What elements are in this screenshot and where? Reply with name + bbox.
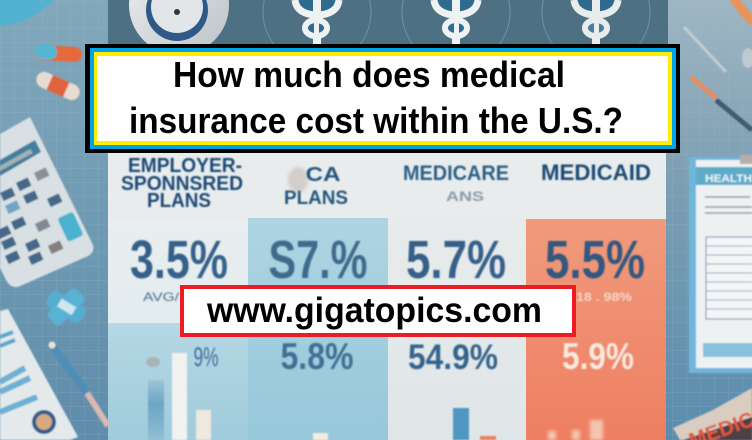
column 3 medicare (388, 218, 526, 440)
table header band (108, 150, 666, 220)
panel: health form document (689, 155, 752, 373)
bar charts (146, 353, 603, 440)
heading: ACA plans: PLANS (284, 188, 348, 209)
icon: stethoscope head (129, 0, 229, 55)
stat: 5.8%: 5.8% (280, 336, 354, 377)
stat: 5.9%: 5.9% (562, 336, 634, 377)
icon: caduceus 1 (263, 0, 371, 66)
heading: ACA plans (284, 164, 348, 209)
icon: capsule pills (34, 44, 82, 103)
stat: 54.9%: 54.9% (408, 338, 498, 377)
percentage figures (130, 230, 645, 377)
column 4 medicaid (526, 219, 666, 440)
icon: caduceus 2 (402, 0, 510, 66)
icon: report sheet with charts (0, 309, 78, 440)
bars: ACA column (313, 433, 328, 440)
stat: 9%: 9% (194, 342, 218, 372)
icon: pen (48, 342, 108, 426)
heading: medicare plans: MEDICARE (403, 162, 509, 185)
title banner (85, 44, 680, 153)
column 2 ACA (248, 218, 388, 440)
bars: employer column (146, 353, 211, 440)
icon: teal mask corner (0, 0, 53, 26)
column 1 employer-sponsored (108, 220, 248, 440)
panel: health form document: HEALTH (705, 173, 752, 185)
heading: employer-sponsored plans (121, 155, 243, 212)
column headings (121, 155, 651, 212)
heading: employer-sponsored plans: EMPLOYER- (128, 155, 242, 177)
icon: caduceus 3 (542, 0, 650, 66)
url text: www.gigatopics.com (206, 291, 542, 330)
stat: 57%: S7.% (268, 230, 368, 290)
heading: medicare plans: ANS (446, 188, 484, 204)
small caption: orange column: 18 . 98% (576, 290, 632, 304)
small caption: avg: AVG/ (143, 290, 180, 304)
website url box (180, 285, 576, 337)
heading: ACA plans: CA (306, 164, 340, 186)
title text (129, 54, 623, 141)
heading: medicaid: MEDICAID (541, 160, 651, 185)
panel: four-column plan table (108, 150, 666, 440)
stat: 5.5%: 5.5% (545, 230, 645, 290)
bars: medicare column (453, 408, 496, 440)
icon: calculator (0, 117, 93, 287)
title text: How much does medical (173, 54, 565, 95)
bars: medicaid column (548, 420, 603, 440)
stat: 5.7%: 5.7% (406, 230, 506, 290)
icon: right-side scalpel and pencil (684, 0, 752, 130)
heading: employer-sponsored plans: PLANS (147, 190, 211, 212)
heading: medicare plans (403, 162, 509, 204)
stat: 3.5%: 3.5% (130, 230, 228, 290)
title text: insurance cost within the U.S.? (129, 100, 623, 141)
icon: medical folder (673, 388, 752, 440)
icon: bandage (44, 286, 88, 328)
heading: employer-sponsored plans: SPONNSRED (121, 173, 243, 195)
